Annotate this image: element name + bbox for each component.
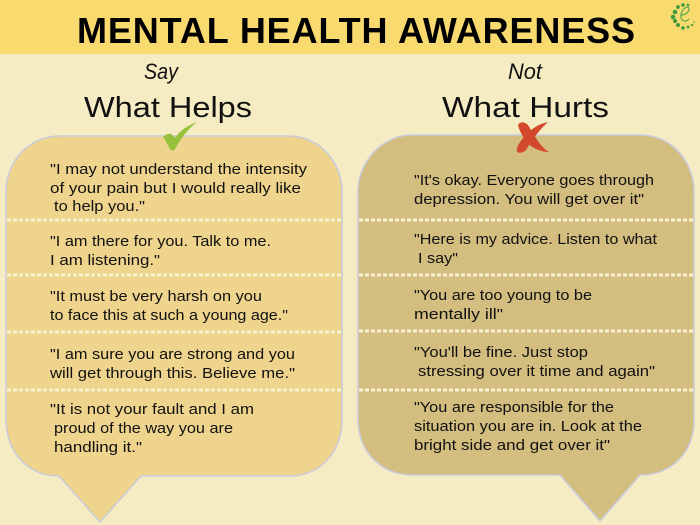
quote: intensity of pain: to help you." — [54, 198, 145, 215]
quote: stop stressing: stressing over it time and again" — [418, 363, 655, 380]
left column heading: What Helps: What Helps — [84, 92, 252, 124]
quote: very harsh: "It must be very harsh on you — [50, 288, 262, 305]
quote: not your fault — [50, 401, 254, 456]
quote: everyone goes through: "It's okay. Everyone goes through — [414, 172, 654, 189]
quote: you are strong: will get through this. Believe me." — [49, 365, 295, 382]
quote: very harsh — [50, 288, 288, 324]
quote: responsible — [414, 399, 642, 454]
quote: very harsh: to face this at such a young age." — [50, 307, 288, 324]
quote: too young — [414, 287, 592, 323]
quote: not your fault: handling it." — [54, 439, 142, 456]
quote: there for you: I am listening." — [50, 252, 160, 269]
quote: not your fault: "It is not your fault and I am — [50, 401, 254, 418]
quote: too young: mentally ill" — [414, 306, 503, 323]
panel: what hurts speech bubble — [358, 135, 694, 521]
dividers — [359, 220, 693, 390]
quote: you are strong: "I am sure you are strong and you — [50, 346, 295, 363]
panel: what helps speech bubble — [6, 136, 342, 522]
icon: logo — [671, 3, 695, 30]
quote: everyone goes through: depression. You will get over it" — [414, 191, 644, 208]
left column heading: Say: Say — [144, 59, 180, 84]
quote: intensity of pain: of your pain but I would really like — [50, 180, 301, 197]
quote: not your fault: proud of the way you are — [54, 420, 233, 437]
quote: everyone goes through — [414, 172, 654, 208]
quote: stop stressing — [414, 344, 655, 380]
quote: stop stressing: "You'll be fine. Just stop — [414, 344, 588, 361]
right column heading: What Hurts: What Hurts — [442, 92, 609, 124]
quote: there for you: "I am there for you. Talk to me. — [50, 233, 271, 250]
quote: responsible: bright side and get over it" — [414, 437, 610, 454]
header band — [0, 0, 700, 54]
quote: too young: "You are too young to be — [414, 287, 592, 304]
quote: there for you — [50, 233, 271, 269]
right column heading: Not: Not — [508, 59, 543, 84]
icon: green check mark — [163, 122, 197, 150]
quote: my advice: "Here is my advice. Listen to what — [414, 231, 658, 248]
quote: you are strong — [49, 346, 295, 382]
quote: responsible: situation you are in. Look at the — [414, 418, 642, 435]
dividers — [7, 220, 341, 390]
title: MENTAL HEALTH AWARENESS — [77, 10, 635, 51]
quote: responsible: "You are responsible for the — [414, 399, 614, 416]
icon: red cross — [517, 122, 549, 153]
quote: intensity of pain — [50, 161, 308, 215]
quote: intensity of pain: "I may not understand the intensity — [50, 161, 308, 178]
quote: my advice — [414, 231, 658, 267]
quote: my advice: I say" — [418, 250, 458, 267]
